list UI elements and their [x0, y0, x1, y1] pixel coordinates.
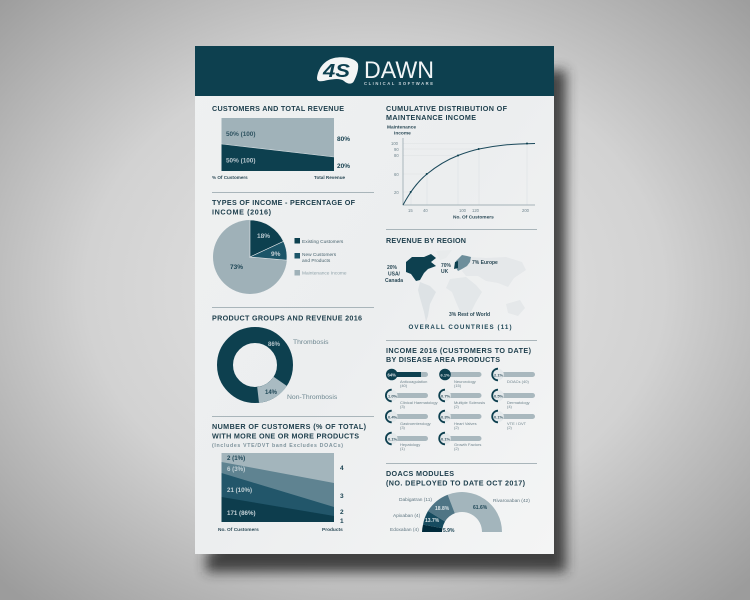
item: growth factors: Growth Factors: [454, 442, 481, 447]
item: anticoagulation: Anticoagulation: [400, 379, 427, 384]
layered area chart: 6 (3%): [227, 466, 245, 473]
heading: DOACS MODULES: [386, 469, 454, 478]
half donut chart: 13.7%: [425, 518, 440, 524]
item: growth factors: (2): [454, 446, 460, 451]
line chart: 120: [472, 208, 480, 213]
world map: Canada: [385, 278, 403, 284]
stacked area chart: 50% (100): [226, 131, 256, 138]
item: heart valves: [439, 411, 482, 430]
panel: number of customers: [212, 422, 367, 533]
layered area chart: Products: [322, 527, 343, 533]
donut chart: Non-Thrombosis: [287, 394, 338, 401]
item: clinical haematology: [386, 390, 438, 409]
item: doacs: DOACs (40): [507, 379, 529, 384]
overall countries caption: OVERALL COUNTRIES (11): [408, 324, 512, 331]
world map: 3% Rest of World: [449, 312, 490, 318]
logo: tagline: CLINICAL SOFTWARE: [364, 81, 433, 86]
item: clinical haematology: Clinical Haematology: [400, 400, 438, 405]
half donut chart: Apixaban (4): [393, 513, 421, 519]
progress items: [386, 369, 535, 451]
page shadow: [206, 70, 566, 572]
line chart: 15: [408, 208, 413, 213]
item: neurology: Neurorology: [454, 379, 476, 384]
donut chart: Thrombosis: [293, 339, 329, 346]
item: heart valves: Heart Valves: [454, 421, 477, 426]
half donut chart: Rivaroxaban (42): [493, 498, 530, 504]
layered area chart: 2: [340, 509, 344, 516]
line chart: No. Of Customers: [453, 214, 494, 220]
pie chart: 18%: [257, 233, 270, 240]
panel: number of customers: WITH MORE ONE OR MORE PRODUCTS: [212, 432, 359, 440]
panel: types of income: [212, 198, 356, 294]
heading: REVENUE BY REGION: [386, 236, 466, 245]
donut chart: 14%: [265, 390, 278, 396]
item: gastroenterology: (3): [400, 425, 406, 430]
heading: NUMBER OF CUSTOMERS (% OF TOTAL): [212, 422, 367, 431]
panel: customers and total revenue: [212, 104, 350, 180]
item: multiple sclerosis: Multiple Sclerosis: [454, 400, 485, 405]
item: hepatology: [386, 433, 428, 451]
panel: cumulative distribution: Income: [394, 130, 411, 136]
panel: doacs modules: (NO. DEPLOYED TO DATE OCT 2017): [386, 478, 526, 488]
line chart: 90: [394, 147, 399, 152]
item: gastroenterology: 0.4%: [388, 414, 398, 419]
item: dermatology: Dermatology: [507, 400, 530, 405]
item: anticoagulation: (40): [400, 383, 408, 388]
item: multiple sclerosis: [439, 390, 485, 409]
half donut chart: Dabigatran (11): [399, 497, 432, 503]
heading: CUMULATIVE DISTRIBUTION OF: [386, 104, 508, 113]
item: hepatology: 0.1%: [388, 436, 398, 441]
item: anticoagulation: [386, 369, 428, 388]
half donut chart: 18.8%: [435, 506, 450, 512]
line chart: 20: [394, 190, 399, 195]
world map: 20%: [387, 265, 398, 271]
line chart: [391, 138, 535, 220]
heading: TYPES OF INCOME - PERCENTAGE OF: [212, 198, 356, 207]
heading: CUSTOMERS AND TOTAL REVENUE: [212, 104, 344, 113]
panel: income by disease area: BY DISEASE AREA PRODUCTS: [386, 355, 500, 364]
heading: PRODUCT GROUPS AND REVENUE 2016: [212, 314, 362, 322]
item: clinical haematology: 1.0%: [388, 393, 398, 398]
item: vte dvt: 0.1%: [494, 414, 504, 419]
line chart: 60: [394, 172, 399, 177]
layered area chart: No. Of Customers: [218, 527, 259, 533]
item: anticoagulation: 64%: [388, 372, 396, 377]
layered area chart: 3: [340, 493, 344, 500]
stacked area chart: [212, 118, 350, 180]
y-axis title: Maintenance: [387, 124, 416, 130]
panel: cumulative distribution: [386, 104, 535, 220]
line chart: 80: [394, 153, 399, 158]
world map: [385, 250, 526, 322]
pie legend: Existing Customers: [302, 239, 344, 245]
stacked area chart: 80%: [337, 136, 350, 143]
stacked area chart: 20%: [337, 163, 350, 170]
item: vte dvt: [492, 411, 535, 430]
panel: product groups and revenue: [212, 314, 362, 403]
item: dermatology: [492, 390, 535, 409]
header band with logo: [195, 46, 554, 96]
item: doacs: 2.1%: [494, 372, 504, 377]
stacked area chart: Total Revenue: [314, 175, 346, 180]
item: growth factors: [439, 433, 482, 451]
item: clinical haematology: (3): [400, 404, 406, 409]
pie chart: 9%: [271, 251, 281, 258]
layered area chart: 2 (1%): [227, 455, 245, 462]
panel: cumulative distribution: MAINTENANCE INCOME: [386, 113, 476, 122]
panel: types of income: INCOME (2016): [212, 208, 272, 216]
pie legend: New Customers: [302, 252, 337, 258]
logo: 4S badge: 4S: [322, 61, 350, 81]
item: multiple sclerosis: (2): [454, 404, 460, 409]
stacked area chart: % Of Customers: [212, 175, 248, 180]
item: heart valves: (2): [454, 425, 460, 430]
panel: doacs modules: [386, 469, 530, 534]
item: dermatology: 0.5%: [494, 393, 504, 398]
item: hepatology: Hepatology: [400, 442, 420, 447]
layered area chart: [218, 453, 344, 533]
world map: UK: [441, 269, 449, 275]
pie chart: 73%: [230, 264, 243, 271]
pie legend: [294, 238, 347, 276]
item: multiple sclerosis: 0.7%: [441, 393, 451, 398]
item: neurology: 6.1%: [440, 372, 450, 377]
item: heart valves: 0.3%: [441, 414, 451, 419]
pie legend: and Products: [302, 258, 331, 264]
item: dermatology: (4): [507, 404, 513, 409]
item: hepatology: (1): [400, 446, 406, 451]
logo: 4S badge: [317, 57, 358, 84]
heading: INCOME 2016 (CUSTOMERS TO DATE): [386, 346, 532, 355]
panel: income by disease area: [386, 346, 535, 451]
item: gastroenterology: Gastroenterology: [400, 421, 431, 426]
pie legend: Maintenance Income: [302, 270, 347, 276]
layered area chart: 171 (86%): [227, 510, 256, 517]
item: neurology: (15): [454, 383, 462, 388]
layered area chart: 21 (10%): [227, 487, 252, 494]
item: growth factors: 0.1%: [441, 436, 451, 441]
item: vte dvt: VTE / DVT: [507, 421, 527, 426]
half donut chart: 61.6%: [473, 505, 488, 511]
donut chart: [225, 335, 338, 403]
item: vte dvt: (2): [507, 425, 513, 430]
layered area chart: 4: [340, 465, 344, 472]
item: gastroenterology: [386, 411, 431, 430]
layered area chart: 1: [340, 518, 344, 525]
line chart: 40: [423, 208, 428, 213]
stacked area chart: 50% (100): [226, 158, 256, 164]
item: doacs: [492, 369, 535, 384]
item: neurology: [439, 369, 482, 388]
world map: 70%: [441, 263, 452, 269]
world map: USA/: [388, 272, 401, 278]
line chart: 200: [522, 208, 530, 213]
half donut chart: [390, 492, 530, 534]
logo: DAWN wordmark: DAWN: [364, 57, 434, 84]
half donut chart: 5.9%: [443, 528, 455, 534]
pie chart: [213, 220, 287, 294]
subheading: (Includes VTE/DVT band Excludes DOACs): [212, 443, 343, 449]
line chart: 100: [391, 141, 399, 146]
donut chart: 86%: [268, 342, 281, 348]
line chart: 100: [459, 208, 467, 213]
world map: 7% Europe: [472, 260, 498, 266]
poster page: [195, 46, 554, 554]
panel: revenue by region: [385, 236, 526, 331]
half donut chart: Edoxaban (4): [390, 527, 419, 533]
